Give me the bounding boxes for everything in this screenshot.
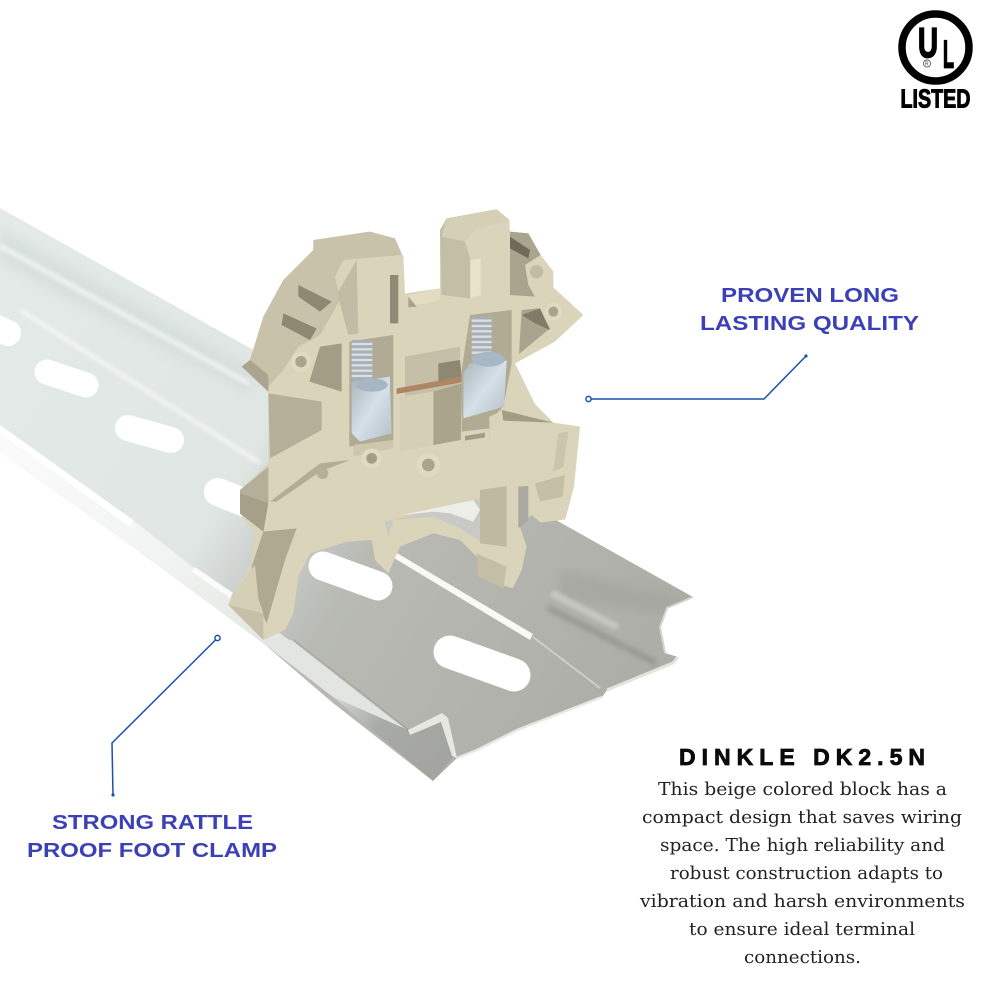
left foot <box>240 467 268 532</box>
product description: to ensure ideal terminal <box>689 919 915 940</box>
product description: connections. <box>744 947 861 968</box>
rail end lip highlights <box>457 697 602 758</box>
callout text: proven long lasting quality: PROVEN LONG <box>721 285 899 307</box>
block silhouette <box>228 209 583 640</box>
callout line: foot clamp <box>111 635 220 797</box>
callout text: strong rattle proof foot clamp: PROOF FOOT CLAMP <box>27 840 277 862</box>
left pockets <box>337 260 358 335</box>
product description <box>639 779 965 968</box>
left wedge shading <box>242 232 402 387</box>
DIN rail <box>0 208 693 781</box>
right wedge <box>510 232 541 297</box>
rail lower flange <box>0 427 300 648</box>
arch opening showing rail <box>385 498 480 542</box>
UL listed logo <box>900 14 970 114</box>
right screw and clamp <box>462 310 553 446</box>
right tower side <box>440 209 509 298</box>
product description: vibration and harsh environments <box>639 891 965 912</box>
terminal block <box>228 209 583 640</box>
left ribs <box>298 285 332 312</box>
product description: robust construction adapts to <box>670 863 943 884</box>
callout text: strong rattle proof foot clamp <box>27 812 277 862</box>
rail mounting slots <box>0 327 8 333</box>
UL listed logo: L <box>943 34 954 76</box>
product heading: DINKLE DK2.5N <box>679 744 929 770</box>
callout text: proven long lasting quality: LASTING QUALITY <box>700 313 920 335</box>
lower band recess <box>553 432 568 472</box>
callout line: proven quality <box>586 354 808 402</box>
callout text: proven long lasting quality <box>700 285 920 335</box>
left screw and clamp <box>349 335 393 457</box>
UL listed logo: LISTED <box>900 86 970 114</box>
callout text: strong rattle proof foot clamp: STRONG RATTLE <box>52 812 253 834</box>
product description: space. The high reliability and <box>660 835 945 856</box>
product description: compact design that saves wiring <box>642 807 962 828</box>
centre notch between towers <box>408 288 440 307</box>
UL listed logo: R <box>925 62 929 68</box>
product description: This beige colored block has a <box>658 779 947 800</box>
right foot column <box>480 486 507 547</box>
UL listed logo: U <box>918 19 938 66</box>
rail surface bands <box>2 235 250 386</box>
centre opening and copper bridge <box>397 347 462 452</box>
mounting holes <box>291 303 562 479</box>
